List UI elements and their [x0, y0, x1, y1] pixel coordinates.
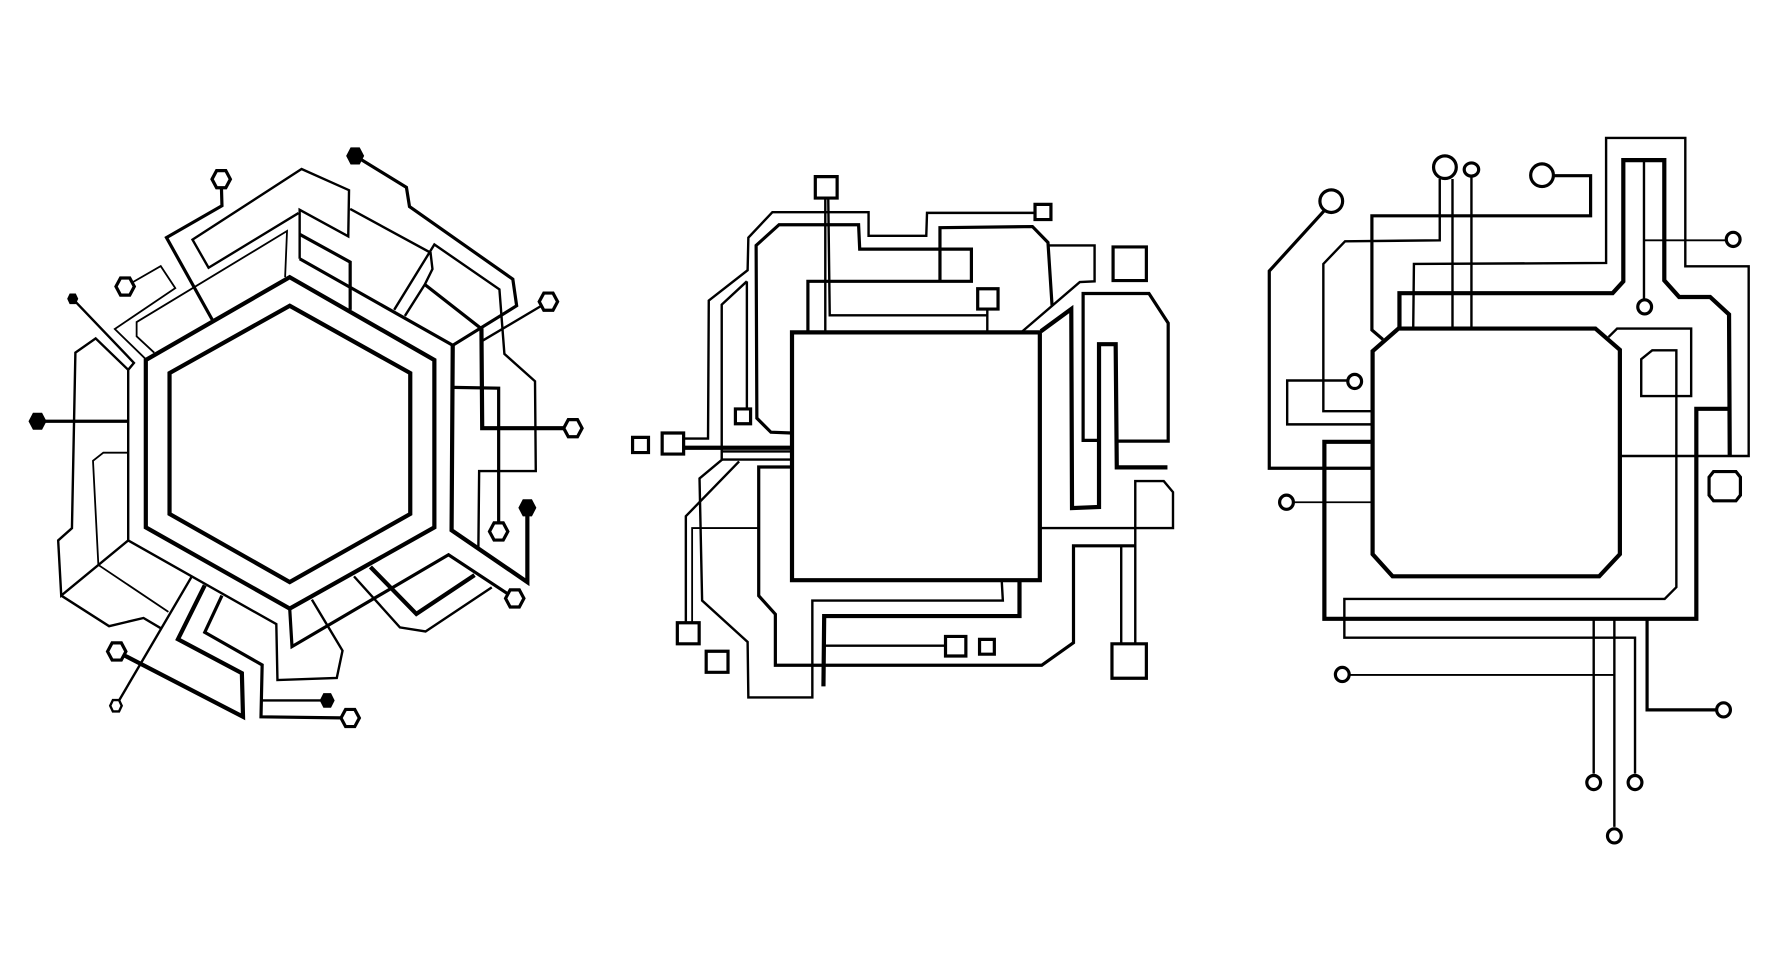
circuit traces around chip — [1269, 138, 1749, 827]
panel: rounded chip circuit frame — [1269, 138, 1749, 843]
circuit traces around square — [685, 198, 1173, 697]
round terminal nodes — [1280, 156, 1740, 843]
middle hexagon outline — [146, 277, 434, 609]
circuit traces around hexagon — [38, 156, 573, 718]
rounded pad — [1709, 472, 1740, 501]
hexagon terminal nodes — [30, 149, 582, 727]
panel: square circuit frame — [633, 177, 1173, 697]
central square — [792, 332, 1040, 580]
inner hexagon outline — [170, 306, 410, 582]
central chip outline — [1373, 329, 1620, 576]
panel: hexagon circuit frame — [30, 149, 582, 727]
square terminal pads — [633, 177, 1146, 678]
